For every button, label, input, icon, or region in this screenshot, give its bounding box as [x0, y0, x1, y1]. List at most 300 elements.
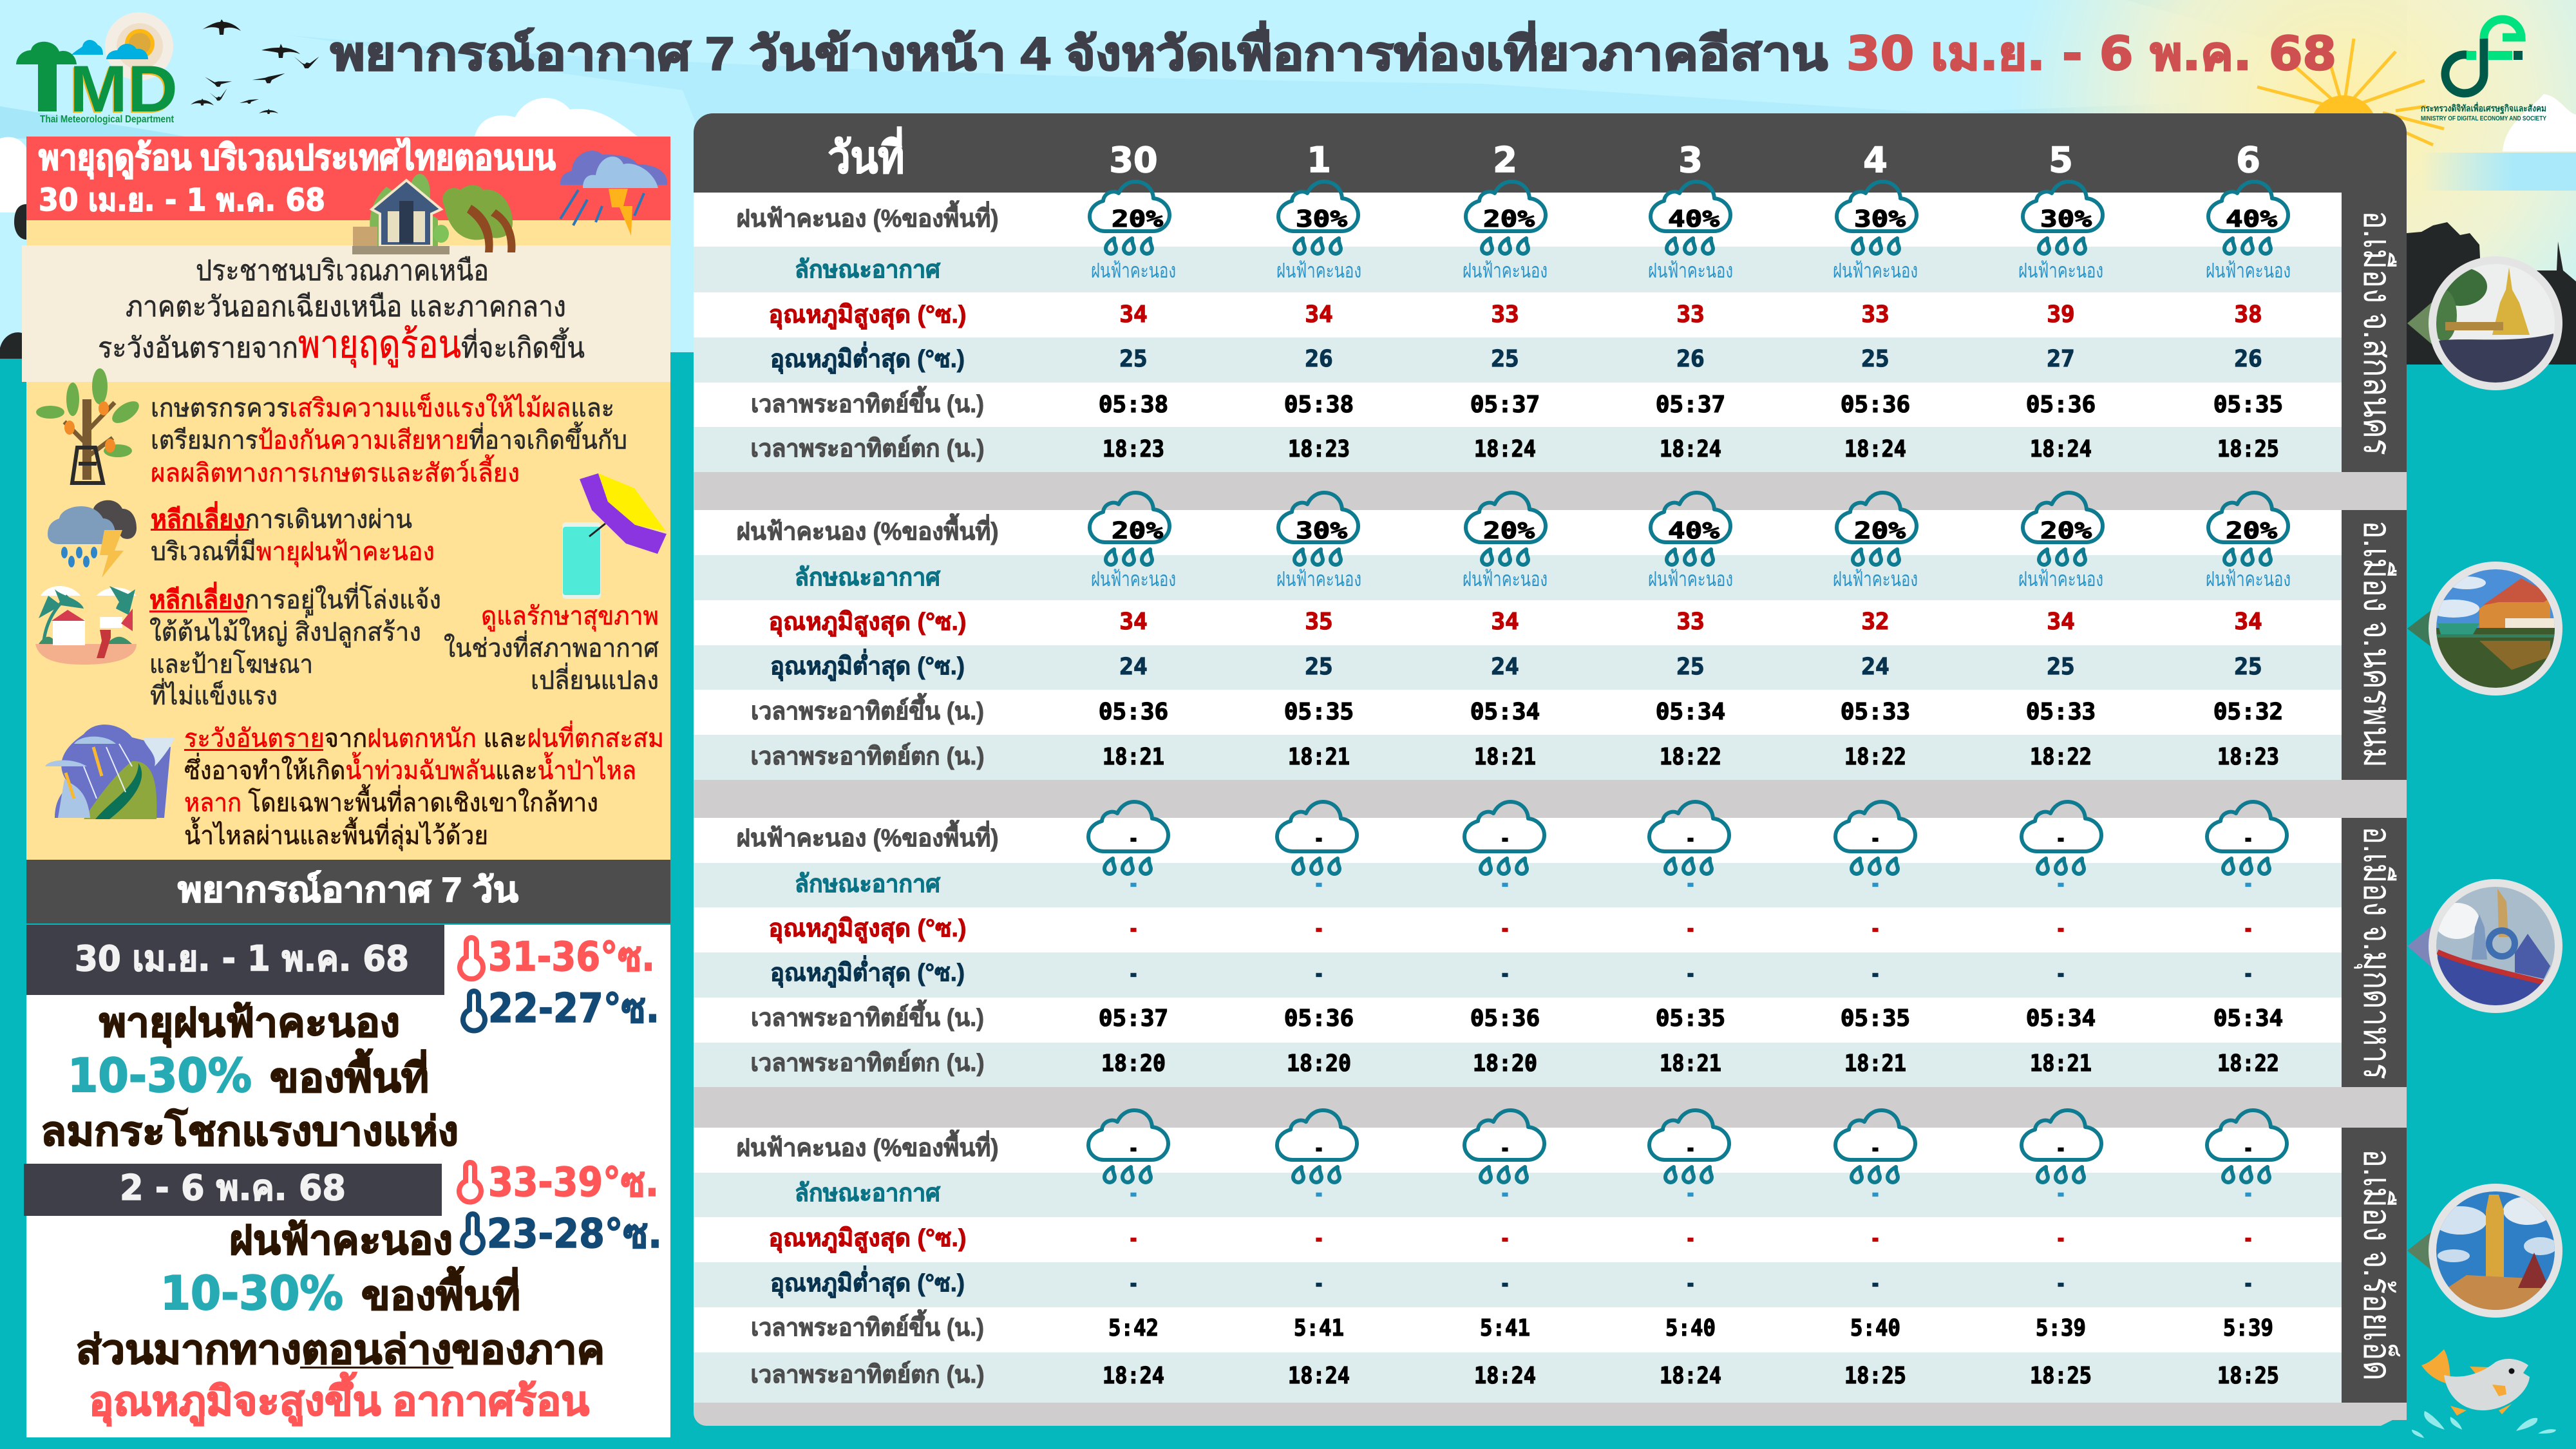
rain clouds without data: - [1128, 1135, 1139, 1162]
rain clouds with percent of area: 30% [1854, 206, 1906, 232]
row: weather type: ฝนฟ้าคะนอง [1833, 259, 1918, 282]
row: maximum temperature: 33 [1676, 301, 1705, 328]
row labels [737, 820, 998, 1077]
logo: Thai Meteorological Department: Thai Meteorological Department [40, 114, 175, 125]
row labels [737, 200, 998, 462]
row labels: เวลาพระอาทิตย์ขึ้น (น.) [751, 386, 984, 418]
text: period two forecast: ของพื้นที่ [361, 1266, 520, 1318]
row stripes [694, 510, 2407, 818]
text: avoid open areas: ที่ไม่แข็งแรง [150, 678, 278, 710]
row: minimum temperature: 24 [1861, 654, 1889, 680]
province label: อ.เมือง จ.สกลนคร [2356, 211, 2399, 455]
row: weather type: - [1128, 871, 1139, 897]
row: maximum temperature: 34 [1119, 609, 1148, 635]
text: avoid open areas [149, 582, 441, 710]
row: sunset [1103, 1363, 2279, 1389]
row labels: ลักษณะอากาศ [795, 256, 941, 283]
row: maximum temperature: 33 [1861, 301, 1889, 328]
icon: house [352, 174, 450, 254]
row: minimum temperature: - [1685, 961, 1696, 987]
row: minimum temperature: - [2243, 961, 2253, 987]
row stripes [694, 818, 2407, 1128]
row: maximum temperature: - [1314, 1226, 1324, 1252]
text: avoid travel: หลีกเลี่ยงการเดินทางผ่าน [151, 501, 412, 534]
rain clouds with percent of area [1090, 182, 2288, 254]
row: minimum temperature: - [1500, 961, 1510, 987]
rain clouds without data: - [2243, 1135, 2253, 1162]
row: weather type: ฝนฟ้าคะนอง [1463, 567, 1548, 591]
row: weather type: - [1685, 871, 1696, 897]
rain clouds without data: - [1314, 826, 1324, 852]
row: maximum temperature: - [1870, 1226, 1880, 1252]
text: avoid open areas: และป้ายโฆษณา [149, 650, 313, 679]
row: weather type: - [2056, 871, 2066, 897]
row: maximum temperature: - [2243, 1226, 2253, 1252]
row: maximum temperature [1128, 916, 2253, 942]
row: minimum temperature: 25 [1305, 654, 1333, 680]
row: sunrise: 5:39 [2036, 1315, 2086, 1341]
text: farmer advice [151, 392, 627, 488]
row: weather type: ฝนฟ้าคะนอง [1463, 259, 1548, 282]
rain clouds with percent of area: 20% [1854, 518, 1906, 544]
logo: Ministry of Digital Economy and Society: กระทรวงดิจิทัลเพื่อเศรษฐกิจและสังคม [2421, 102, 2546, 115]
row: weather type [1128, 1180, 2253, 1207]
row: minimum temperature: - [2056, 961, 2066, 987]
text: avoid travel: บริเวณที่มีพายุฝนฟ้าคะนอง [151, 534, 435, 567]
rain clouds with percent of area: 20% [1483, 518, 1535, 544]
date numbers: 3 [1678, 140, 1703, 180]
row: weather type: - [2056, 1180, 2066, 1207]
row: weather type: - [1870, 871, 1880, 897]
row: minimum temperature: - [1685, 1271, 1696, 1297]
row: sunset: 18:21 [1288, 744, 1350, 770]
row: maximum temperature: - [1314, 916, 1324, 942]
row: sunrise: 05:33 [2026, 699, 2096, 725]
row: sunrise: 05:37 [1099, 1005, 1168, 1032]
row: minimum temperature: 26 [2234, 346, 2262, 372]
row: maximum temperature: - [1870, 916, 1880, 942]
row: minimum temperature: 25 [2234, 654, 2262, 680]
row: sunrise [1099, 1005, 2283, 1032]
province label [2342, 1128, 2407, 1403]
period two date bar [24, 1164, 442, 1216]
text: health care advice: ดูแลรักษาสุขภาพ [481, 602, 659, 632]
row labels: ฝนฟ้าคะนอง (%ของพื้นที่) [737, 200, 998, 232]
panel: cream warning text [22, 245, 670, 382]
row: sunrise: 5:41 [1480, 1315, 1530, 1341]
row: maximum temperature: - [1128, 1226, 1139, 1252]
province label [2342, 818, 2407, 1087]
row: sunset [1103, 744, 2279, 770]
date numbers: 2 [1493, 140, 1517, 180]
row: sunset: 18:20 [1287, 1050, 1351, 1077]
row: maximum temperature: - [1128, 916, 1139, 942]
row: maximum temperature: 34 [2234, 609, 2262, 635]
row: sunset: 18:21 [1474, 744, 1536, 770]
rain clouds without data: - [1685, 826, 1696, 852]
rain clouds with percent of area: 30% [1296, 518, 1347, 544]
row labels [737, 513, 998, 770]
panel: Sakon Nakhon forecast [694, 182, 2407, 510]
row: weather type: ฝนฟ้าคะนอง [1276, 259, 1361, 282]
text: avoid open areas: หลีกเลี่ยงการอยู่ในที่โล่งแจ้ง [149, 582, 441, 615]
illustration: leaping fish [2412, 1349, 2556, 1438]
heading: date: วันที่ [828, 126, 904, 182]
row stripes [694, 1128, 2407, 1426]
row labels: ลักษณะอากาศ [795, 1180, 941, 1207]
row: weather type: - [1500, 1180, 1510, 1207]
period one date bar: 30 เม.ย. - 1 พ.ค. 68 [75, 938, 409, 979]
row: sunset: 18:22 [1660, 744, 1721, 770]
row: sunrise [1099, 392, 2283, 418]
period two date bar: 2 - 6 พ.ค. 68 [120, 1168, 346, 1208]
row: sunset: 18:23 [1103, 436, 1164, 462]
row: maximum temperature: 35 [1305, 609, 1333, 635]
row: maximum temperature: 39 [2047, 301, 2075, 328]
row: minimum temperature: - [2056, 1271, 2066, 1297]
row labels: เวลาพระอาทิตย์ตก (น.) [751, 1361, 984, 1388]
row labels: ลักษณะอากาศ [795, 871, 941, 898]
row labels: ฝนฟ้าคะนอง (%ของพื้นที่) [737, 513, 998, 545]
text: period one forecast: 10-30% [68, 1048, 252, 1103]
row: sunrise: 05:36 [1841, 392, 1910, 418]
icon: trees bending in wind [442, 185, 516, 252]
row: minimum temperature [1128, 961, 2253, 987]
row: sunset: 18:22 [2030, 744, 2092, 770]
rain clouds with percent of area: 20% [2040, 518, 2092, 544]
row: sunrise: 5:41 [1294, 1315, 1344, 1341]
row: sunset: 18:22 [2217, 1050, 2279, 1077]
logo: Thai Meteorological Department: MD [68, 53, 176, 127]
row: maximum temperature [1128, 1226, 2253, 1252]
rain clouds without data: - [1314, 1135, 1324, 1162]
row: sunset: 18:24 [1844, 436, 1906, 462]
row labels: เวลาพระอาทิตย์ขึ้น (น.) [751, 693, 984, 725]
row: sunset: 18:25 [2030, 1363, 2092, 1389]
row: minimum temperature: 25 [2047, 654, 2075, 680]
row: sunrise: 05:36 [1470, 1005, 1540, 1032]
rain clouds without data: - [1685, 1135, 1696, 1162]
icon: sun at top right [2257, 39, 2444, 162]
text: farmer advice: ผลผลิตทางการเกษตรและสัตว์เลี้ยง [151, 454, 520, 488]
text: period two forecast: ฝนฟ้าคะนอง [229, 1218, 453, 1263]
heading: warning dates: 30 เม.ย. - 1 พ.ค. 68 [39, 182, 325, 218]
row: weather type: - [1314, 871, 1324, 897]
row: sunset: 18:24 [1103, 1363, 1164, 1389]
panel: weather forecast table [694, 113, 2407, 1426]
row labels: เวลาพระอาทิตย์ตก (น.) [751, 435, 984, 462]
rain clouds with percent of area: 30% [2040, 206, 2092, 232]
row: sunrise: 05:38 [1284, 392, 1354, 418]
row labels: อุณหภูมิต่ำสุด (°ซ.) [770, 1265, 965, 1298]
row: sunrise: 05:35 [1841, 1005, 1910, 1032]
row: sunset: 18:24 [1660, 436, 1721, 462]
rain clouds with percent of area: 20% [1483, 206, 1535, 232]
row: weather type: ฝนฟ้าคะนอง [1648, 259, 1733, 282]
row: sunset: 18:25 [2217, 436, 2279, 462]
text: period one forecast: ของพื้นที่ [270, 1048, 429, 1101]
text: period one forecast: พายุฝนฟ้าคะนอง [99, 1001, 400, 1047]
row: maximum temperature: 34 [1305, 301, 1333, 328]
row: maximum temperature: 33 [1676, 609, 1705, 635]
rain clouds with percent of area: 30% [1296, 206, 1347, 232]
row: weather type: - [1314, 1180, 1324, 1207]
icon: fruit tree with support [36, 368, 143, 483]
row: maximum temperature: - [2056, 916, 2066, 942]
row: sunrise: 5:40 [1665, 1315, 1716, 1341]
row labels: เวลาพระอาทิตย์ขึ้น (น.) [751, 1309, 984, 1341]
text: flood warning: หลาก โดยเฉพาะพื้นที่ลาดเชิงเขาใกล้ทาง [184, 784, 598, 817]
photo: Mukdahan naga temple [2407, 879, 2562, 1013]
photo: Nakhon Phanom temple [2407, 562, 2562, 696]
row: sunset: 18:24 [2030, 436, 2092, 462]
row: weather type: ฝนฟ้าคะนอง [2018, 259, 2103, 282]
row: maximum temperature: 34 [1491, 609, 1519, 635]
row labels: อุณหภูมิต่ำสุด (°ซ.) [770, 341, 965, 374]
row labels: เวลาพระอาทิตย์ตก (น.) [751, 1049, 984, 1077]
row: sunset: 18:21 [1844, 1050, 1906, 1077]
row: sunrise [1099, 699, 2283, 725]
row: sunset: 18:21 [2030, 1050, 2092, 1077]
row: sunrise: 5:42 [1108, 1315, 1159, 1341]
panel: seven day forecast summary [24, 860, 670, 1437]
row: maximum temperature: - [1500, 916, 1510, 942]
text: farmer advice: เตรียมการป้องกันความเสียหายที่อาจเกิดขึ้นกับ [151, 421, 627, 455]
rain clouds without data: - [1500, 826, 1510, 852]
row labels: ฝนฟ้าคะนอง (%ของพื้นที่) [737, 1130, 998, 1162]
row: minimum temperature: 25 [1676, 654, 1705, 680]
icon: rain storm [48, 500, 137, 578]
rain clouds with percent of area: 20% [2226, 518, 2277, 544]
rain clouds with percent of area [1090, 493, 2288, 565]
icon: thunderstorm in header [560, 151, 667, 236]
text: health care advice: ในช่วงที่สภาพอากาศ [444, 630, 659, 663]
row: weather type [1128, 871, 2253, 897]
row: weather type [1091, 259, 2291, 282]
row labels: ฝนฟ้าคะนอง (%ของพื้นที่) [737, 820, 998, 852]
photo: Roi Et standing Buddha [2407, 1184, 2562, 1318]
row: sunset [1101, 1050, 2279, 1077]
row: sunrise: 05:34 [2213, 1005, 2283, 1032]
row: maximum temperature: 34 [2047, 609, 2075, 635]
row: weather type: - [2243, 871, 2253, 897]
row: sunrise: 05:32 [2213, 699, 2283, 725]
panel: Nakhon Phanom forecast [694, 493, 2407, 818]
text: affected regions: ประชาชนบริเวณภาคเหนือ [196, 255, 489, 287]
row: maximum temperature: - [1500, 1226, 1510, 1252]
rain clouds with percent of area: 20% [1112, 518, 1163, 544]
row: weather type: - [1870, 1180, 1880, 1207]
row: maximum temperature [1119, 301, 2262, 328]
row: sunset: 18:23 [1288, 436, 1350, 462]
row: maximum temperature: 33 [1491, 301, 1519, 328]
row: weather type: ฝนฟ้าคะนอง [1276, 567, 1361, 591]
panel: yellow safety advice [26, 382, 670, 860]
text: period two forecast [76, 1218, 605, 1426]
row: minimum temperature: - [1870, 961, 1880, 987]
rain clouds without data: - [2243, 826, 2253, 852]
row: sunrise: 05:37 [1470, 392, 1540, 418]
row: sunset: 18:25 [1844, 1363, 1906, 1389]
row labels: ลักษณะอากาศ [795, 564, 941, 591]
row: weather type: - [1500, 871, 1510, 897]
logo: Ministry of Digital Economy and Society: MINISTRY OF DIGITAL ECONOMY AND SOCIETY [2421, 115, 2546, 122]
text: farmer advice: เกษตรกรควรเสริมความแข็งแรงให้ไม้ผลและ [151, 392, 614, 422]
date numbers: 5 [2049, 140, 2073, 180]
row: sunrise: 5:39 [2223, 1315, 2273, 1341]
row: weather type: - [2243, 1180, 2253, 1207]
row: sunrise: 05:33 [1841, 699, 1910, 725]
text: period two forecast: 10-30% [160, 1266, 343, 1320]
date numbers: 6 [2236, 140, 2260, 180]
province label [2342, 193, 2407, 472]
row: minimum temperature: 24 [1119, 654, 1148, 680]
row: sunrise: 05:36 [1284, 1005, 1354, 1032]
rain clouds without data [1088, 1110, 2287, 1182]
row: minimum temperature: 26 [1676, 346, 1705, 372]
row: maximum temperature: - [2243, 916, 2253, 942]
row: maximum temperature: - [1685, 916, 1696, 942]
row: sunset: 18:24 [1660, 1363, 1721, 1389]
row: sunset: 18:22 [1844, 744, 1906, 770]
row labels: อุณหภูมิสูงสุด (°ซ.) [769, 1225, 966, 1253]
row: weather type: ฝนฟ้าคะนอง [1091, 567, 1176, 591]
row: minimum temperature: 25 [1491, 346, 1519, 372]
text: affected regions: ภาคตะวันออกเฉียงเหนือ และภาคกลาง [126, 291, 566, 323]
row: sunrise: 05:34 [1470, 699, 1540, 725]
rain clouds without data: - [1870, 826, 1880, 852]
icon: umbrella [580, 473, 667, 554]
text: flood warning [184, 721, 664, 851]
row: minimum temperature: - [1314, 961, 1324, 987]
row: sunrise: 05:35 [2213, 392, 2283, 418]
text: flood warning: น้ำไหลผ่านและพื้นที่ลุ่มไว้ด้วย [184, 817, 488, 851]
province label: อ.เมือง จ.ร้อยเอ็ด [2356, 1149, 2400, 1381]
text: flood warning: ระวังอันตรายจากฝนตกหนัก และฝนที่ตกสะสม [184, 721, 664, 753]
row: minimum temperature: 25 [1119, 346, 1148, 372]
row: weather type: - [1685, 1180, 1696, 1207]
text: health care advice: เปลี่ยนแปลง [531, 663, 659, 695]
row: sunset: 18:20 [1473, 1050, 1537, 1077]
date numbers: 30 [1109, 140, 1158, 180]
row: weather type: ฝนฟ้าคะนอง [2018, 567, 2103, 591]
row: weather type [1091, 567, 2291, 591]
row: minimum temperature: - [1500, 1271, 1510, 1297]
photo: Sakon Nakhon temple [2407, 256, 2562, 390]
row: sunrise: 05:38 [1099, 392, 1168, 418]
row: sunset: 18:21 [1103, 744, 1164, 770]
text: affected regions: พายุฤดูร้อน [298, 323, 461, 368]
text: avoid open areas: ใต้ต้นไม้ใหญ่ สิ่งปลูกสร้าง [149, 614, 421, 647]
period one date bar [26, 925, 444, 995]
text: affected regions [98, 255, 585, 368]
row: weather type: ฝนฟ้าคะนอง [2206, 259, 2291, 282]
row labels: อุณหภูมิสูงสุด (°ซ.) [769, 915, 966, 943]
date numbers: 1 [1307, 140, 1331, 180]
panel: red heat-storm header [26, 137, 670, 245]
rain clouds with percent of area: 40% [2226, 206, 2277, 232]
text: period two forecast: ส่วนมากทางตอนล่างของภาค [76, 1328, 605, 1372]
rain clouds with percent of area: 40% [1668, 206, 1719, 232]
row: sunrise: 05:35 [1284, 699, 1354, 725]
row: sunset: 18:24 [1474, 436, 1536, 462]
row labels: เวลาพระอาทิตย์ขึ้น (น.) [751, 999, 984, 1032]
row: weather type: - [1128, 1180, 1139, 1207]
heading: seven day forecast: พยากรณ์อากาศ 7 วัน [178, 870, 518, 909]
row: sunrise: 05:35 [1656, 1005, 1725, 1032]
rain clouds with percent of area: 20% [1112, 206, 1163, 232]
logo: Ministry of Digital Economy and Society [2421, 19, 2546, 122]
row: minimum temperature: - [2243, 1271, 2253, 1297]
rain clouds without data [1088, 802, 2287, 874]
row: sunrise [1108, 1315, 2273, 1341]
row: maximum temperature [1119, 609, 2262, 635]
icon: flock of birds [191, 19, 319, 114]
text: health care advice [444, 602, 659, 695]
row: sunrise: 05:36 [2026, 392, 2096, 418]
row: sunrise: 05:34 [2026, 1005, 2096, 1032]
rain clouds without data: - [1500, 1135, 1510, 1162]
period two minimum temperature: 23-28°ซ. [487, 1210, 662, 1257]
logo: Thai Meteorological Department: MD [70, 52, 178, 126]
text: period one forecast: ลมกระโชกแรงบางแห่ง [41, 1108, 459, 1154]
row: maximum temperature: 34 [1119, 301, 1148, 328]
row: minimum temperature: - [1128, 961, 1139, 987]
panel: Roi Et forecast [694, 1110, 2407, 1426]
row: sunset: 18:24 [1474, 1363, 1536, 1389]
icon: flash flood [45, 724, 175, 819]
rain clouds with percent of area: 40% [1668, 518, 1719, 544]
row: sunrise: 05:36 [1099, 699, 1168, 725]
logo: Thai Meteorological Department [16, 12, 178, 127]
row labels: อุณหภูมิต่ำสุด (°ซ.) [770, 955, 965, 988]
row: weather type: ฝนฟ้าคะนอง [1091, 259, 1176, 282]
row labels [737, 1130, 998, 1388]
text: affected regions: ที่จะเกิดขึ้น [461, 327, 585, 364]
panel: Mukdahan forecast [694, 802, 2407, 1128]
text: affected regions: ระวังอันตรายจาก [98, 332, 298, 364]
period one minimum temperature: 22-27°ซ. [488, 985, 659, 1032]
text: period one forecast [41, 1001, 459, 1154]
rain clouds without data: - [2056, 1135, 2066, 1162]
date numbers: 4 [1863, 140, 1888, 180]
row: sunset: 18:21 [1660, 1050, 1721, 1077]
title date range: 30 เม.ย. - 6 พ.ค. 68 [1846, 26, 2336, 80]
icon: person in strong wind [35, 586, 137, 665]
date numbers [1109, 140, 2260, 180]
period two maximum temperature: 33-39°ซ. [488, 1159, 659, 1206]
row labels: อุณหภูมิสูงสุด (°ซ.) [769, 301, 966, 330]
row: minimum temperature [1128, 1271, 2253, 1297]
rain clouds without data: - [1870, 1135, 1880, 1162]
row stripes [694, 193, 2407, 510]
row labels: เวลาพระอาทิตย์ตก (น.) [751, 743, 984, 770]
row: minimum temperature: 24 [1491, 654, 1519, 680]
row: sunset: 18:25 [2217, 1363, 2279, 1389]
row: maximum temperature: 32 [1861, 609, 1889, 635]
row: minimum temperature: 26 [1305, 346, 1333, 372]
row: minimum temperature: - [1128, 1271, 1139, 1297]
province label: อ.เมือง จ.มุกดาหาร [2354, 826, 2399, 1079]
row: maximum temperature: 38 [2234, 301, 2262, 328]
row labels: อุณหภูมิต่ำสุด (°ซ.) [770, 649, 965, 681]
title: พยากรณ์อากาศ 7 วันข้างหน้า 4 จังหวัดเพื่อการท่องเที่ยวภาคอีสาน [330, 21, 1828, 80]
row: weather type: ฝนฟ้าคะนอง [2206, 567, 2291, 591]
row: sunrise: 05:37 [1656, 392, 1725, 418]
row: minimum temperature: 27 [2047, 346, 2075, 372]
icon: glass of water [562, 522, 601, 599]
row: weather type: ฝนฟ้าคะนอง [1833, 567, 1918, 591]
